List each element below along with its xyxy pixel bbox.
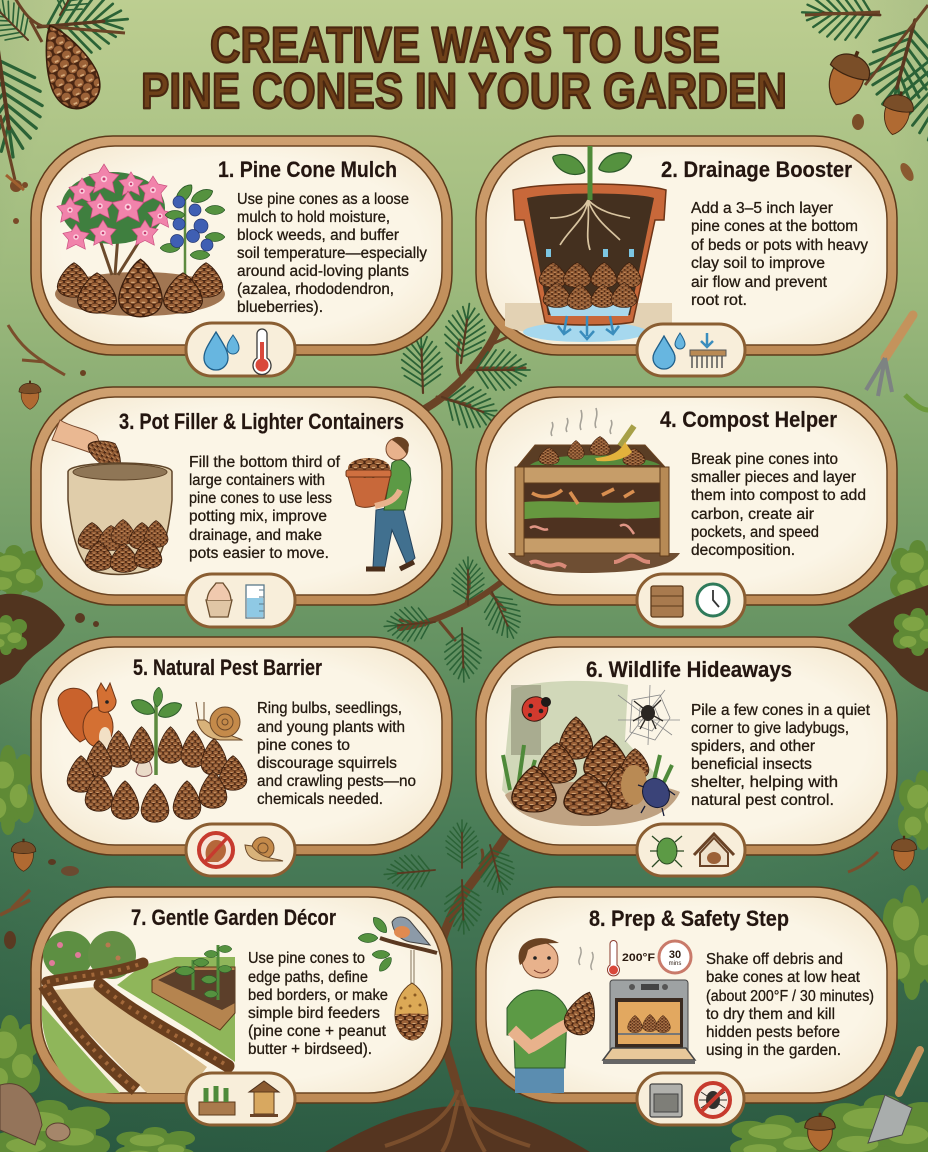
body text: simple bird feeders: [248, 1005, 380, 1022]
body text: [257, 700, 416, 808]
body text: pine cones at the bottom: [691, 218, 858, 235]
heading: 7. Gentle Garden Décor: [131, 905, 336, 930]
body text: [691, 702, 871, 809]
body text: (pine cone + peanut: [248, 1023, 387, 1040]
body text: [706, 951, 874, 1059]
body text: decomposition.: [691, 542, 795, 559]
illustration: man, oven, thermometer and timer: mins: [669, 961, 681, 967]
body text: natural pest control.: [691, 792, 834, 809]
icon badge: water and temperature: [186, 323, 295, 376]
body text: chemicals needed.: [257, 791, 383, 808]
body text: pots easier to move.: [189, 545, 329, 562]
body text: and crawling pests—no: [257, 773, 416, 790]
body text: Use pine cones as a loose: [237, 191, 409, 208]
body text: (azalea, rhododendron,: [237, 281, 394, 298]
body text: drainage, and make: [189, 527, 322, 544]
body text: of beds or pots with heavy: [691, 237, 868, 254]
panel 6: wildlife hideaways: [476, 637, 897, 876]
illustration: azalea, blueberries and cones: [55, 164, 225, 317]
illustration: pot cross-section: [505, 146, 672, 342]
body text: Add a 3–5 inch layer: [691, 200, 833, 217]
body text: [237, 191, 427, 316]
soil mound and roots: [325, 1090, 590, 1152]
right edge decor: fork, moss, soil, acorn, trowel: [730, 315, 928, 1152]
title: [141, 17, 787, 119]
heading: 2. Drainage Booster: [661, 157, 852, 182]
body text: blueberries).: [237, 299, 323, 316]
corner decor: top-left pine: [0, 0, 130, 180]
body text: smaller pieces and layer: [691, 469, 856, 486]
body text: edge paths, define: [248, 969, 368, 986]
body text: potting mix, improve: [189, 508, 327, 525]
body text: Break pine cones into: [691, 451, 838, 468]
body text: butter + birdseed).: [248, 1041, 372, 1058]
body text: pockets, and speed: [691, 524, 819, 541]
illustration: squirrel, seedling, snail and cone ring: [58, 683, 247, 822]
body text: [248, 950, 388, 1058]
body text: block weeds, and buffer: [237, 227, 399, 244]
heading: 4. Compost Helper: [660, 407, 837, 432]
body text: Pile a few cones in a quiet: [691, 702, 871, 719]
icon badge: bin and clock: [637, 574, 745, 627]
central pine tree: [383, 301, 530, 1135]
body text: mulch to hold moisture,: [237, 209, 390, 226]
panel 4: compost helper: [476, 387, 897, 627]
body text: hidden pests before: [706, 1024, 840, 1041]
body text: shelter, helping with: [691, 774, 838, 791]
panel 8: prep and safety: [476, 887, 897, 1125]
body text: root rot.: [691, 292, 747, 309]
illustration: pot and man carrying pot: [52, 420, 415, 574]
panel 3: pot filler: [31, 387, 452, 627]
body text: pine cones to: [257, 737, 350, 754]
body text: pine cones to use less: [189, 490, 332, 507]
icon badge: beetle and shelter: [637, 824, 745, 876]
illustration: man, oven, thermometer and timer: [507, 938, 695, 1093]
illustration: man, oven, thermometer and timer: 30: [669, 949, 681, 961]
illustration: cones pile with ladybug, spider and beetle: [502, 681, 680, 826]
panel 1: pine cone mulch: [31, 136, 452, 376]
body text: spiders, and other: [691, 738, 815, 755]
body text: beneficial insects: [691, 756, 812, 773]
body text: (about 200°F / 30 minutes): [706, 988, 874, 1005]
title: PINE CONES IN YOUR GARDEN: [141, 63, 787, 119]
icon badge: water and filter: [637, 324, 745, 376]
body text: clay soil to improve: [691, 255, 825, 272]
body text: Ring bulbs, seedlings,: [257, 700, 402, 717]
panel 2: drainage booster: [476, 136, 897, 376]
body text: air flow and prevent: [691, 274, 828, 291]
panel 5: natural pest barrier: [31, 637, 452, 876]
body text: to dry them and kill: [706, 1006, 835, 1023]
illustration: compost bin: [508, 408, 680, 573]
illustration: garden path, raised bed, bird feeder: [42, 914, 437, 1093]
body text: around acid-loving plants: [237, 263, 409, 280]
panel 7: gentle garden decor: [31, 887, 452, 1125]
body text: Fill the bottom third of: [189, 454, 341, 471]
body text: using in the garden.: [706, 1042, 841, 1059]
heading: 5. Natural Pest Barrier: [133, 655, 322, 680]
body text: [691, 200, 868, 309]
title: CREATIVE WAYS TO USE: [210, 17, 720, 73]
illustration: man, oven, thermometer and timer: 200°F: [622, 952, 655, 964]
body text: [691, 451, 866, 559]
left edge decor: twigs, acorns, moss, soil: [0, 175, 195, 1152]
icon badge: no squirrels and snail: [186, 824, 295, 876]
body text: corner to give ladybugs,: [691, 720, 849, 737]
body text: soil temperature—especially: [237, 245, 427, 262]
body text: large containers with: [189, 472, 325, 489]
heading: 1. Pine Cone Mulch: [218, 157, 397, 182]
heading: 8. Prep & Safety Step: [589, 906, 789, 931]
icon badge: oven and no bugs: [637, 1073, 744, 1125]
icon badge: bed and feeder: [186, 1073, 295, 1125]
body text: Shake off debris and: [706, 951, 843, 968]
heading: 6. Wildlife Hideaways: [586, 657, 792, 682]
body text: and young plants with: [257, 719, 405, 736]
body text: bake cones at low heat: [706, 969, 861, 986]
icon badge: light pot and measure: [186, 574, 295, 627]
body text: bed borders, or make: [248, 987, 388, 1004]
body text: Use pine cones to: [248, 950, 365, 967]
body text: discourage squirrels: [257, 755, 397, 772]
corner decor: top-right pine and acorns: [801, 0, 928, 183]
body text: them into compost to add: [691, 487, 866, 504]
body text: carbon, create air: [691, 506, 814, 523]
body text: [189, 454, 341, 562]
heading: 3. Pot Filler & Lighter Containers: [119, 409, 404, 434]
